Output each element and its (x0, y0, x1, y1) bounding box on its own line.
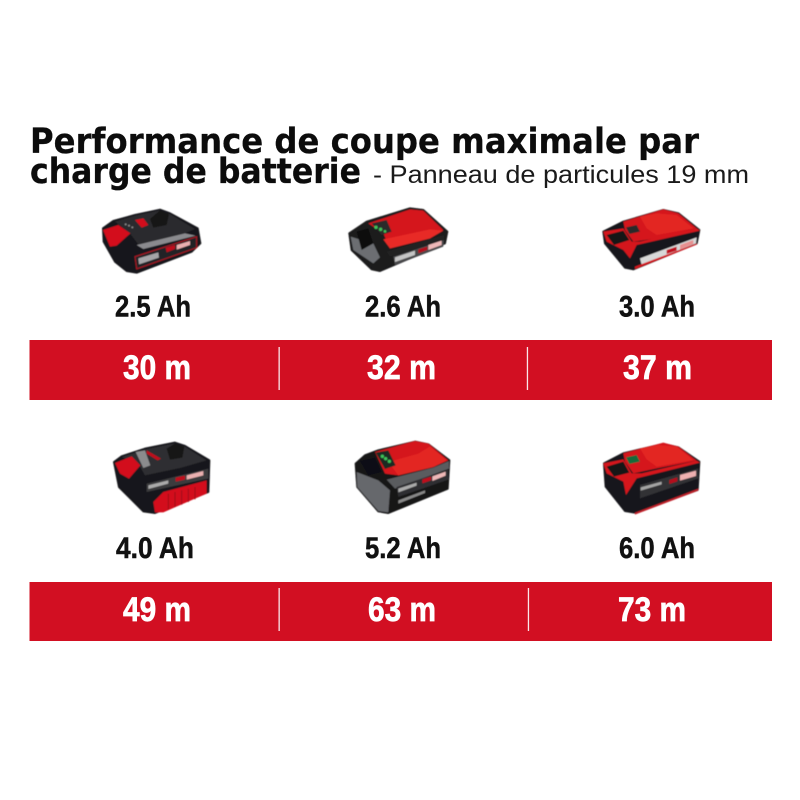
title: Performance de coupe maximale par (30, 122, 700, 162)
bar: runtime row 2 (30, 582, 772, 641)
bar: runtime row 2: 73 m (618, 591, 686, 629)
label: 4.0 Ah: 4.0 Ah (116, 532, 194, 565)
icon: battery 5.2 Ah (356, 441, 449, 513)
bar: runtime row 1: 37 m (623, 349, 692, 387)
icon: battery 3.0 Ah (603, 209, 700, 269)
label: 5.2 Ah: 5.2 Ah (365, 532, 441, 565)
label: 2.6 Ah: 2.6 Ah (365, 290, 441, 324)
subtitle: - Panneau de particules 19 mm (373, 161, 749, 189)
bar: runtime row 1 (30, 340, 772, 400)
label: 2.5 Ah: 2.5 Ah (115, 290, 191, 324)
icon: battery 2.5 Ah (103, 210, 200, 273)
bar: runtime row 1: 30 m (123, 349, 191, 387)
bar: runtime row 1: 32 m (367, 349, 436, 387)
icon: battery 6.0 Ah (603, 443, 700, 515)
label: 6.0 Ah: 6.0 Ah (619, 532, 695, 565)
title: charge de batterie (30, 152, 361, 192)
label: 3.0 Ah: 3.0 Ah (619, 290, 695, 324)
icon: battery 2.6 Ah (349, 208, 447, 271)
title (30, 122, 700, 192)
bar: runtime row 2: 49 m (123, 591, 191, 629)
icon: battery 4.0 Ah (114, 443, 209, 513)
bar: runtime row 2: 63 m (368, 591, 436, 629)
